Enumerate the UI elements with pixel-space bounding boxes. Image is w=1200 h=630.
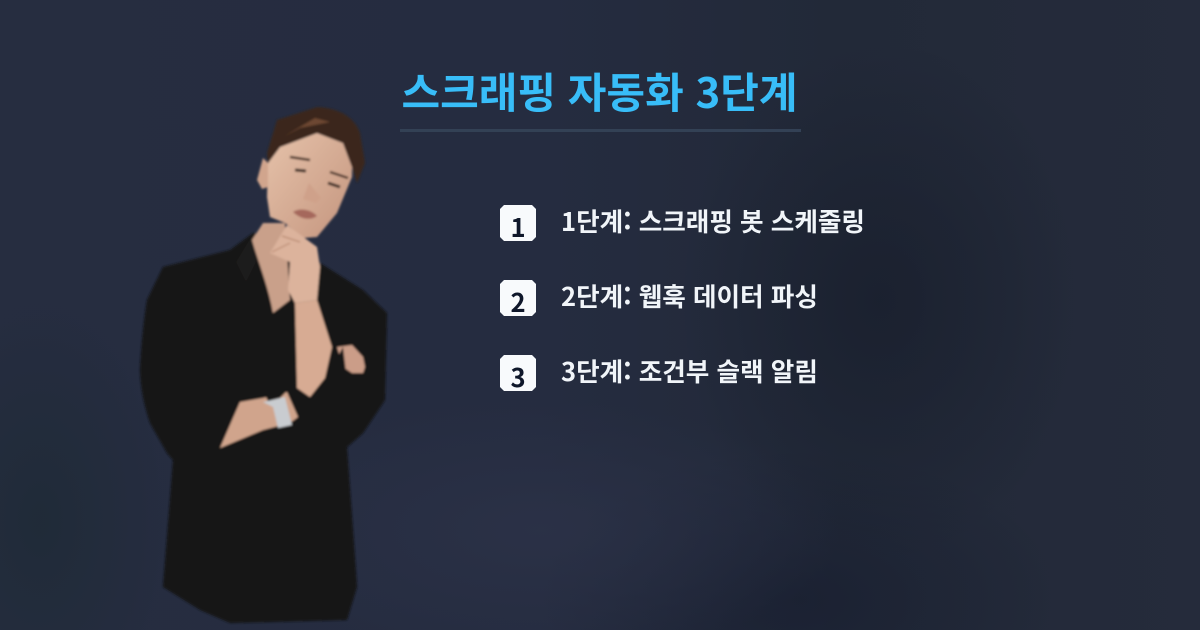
badge 1: 1: [510, 208, 526, 245]
step 2 text: 2단계: 웹훅 데이터 파싱: [561, 277, 818, 314]
step 1 text: 1단계: 스크래핑 봇 스케줄링: [561, 202, 865, 239]
badge 3: [500, 355, 536, 391]
badge 1: [500, 205, 536, 241]
badge 2: 2: [510, 283, 526, 320]
badge 3: 3: [510, 358, 526, 395]
title: 스크래핑 자동화 3단계: [401, 60, 798, 121]
badge 2: [500, 280, 536, 316]
step 3 text: 3단계: 조건부 슬랙 알림: [561, 352, 818, 389]
